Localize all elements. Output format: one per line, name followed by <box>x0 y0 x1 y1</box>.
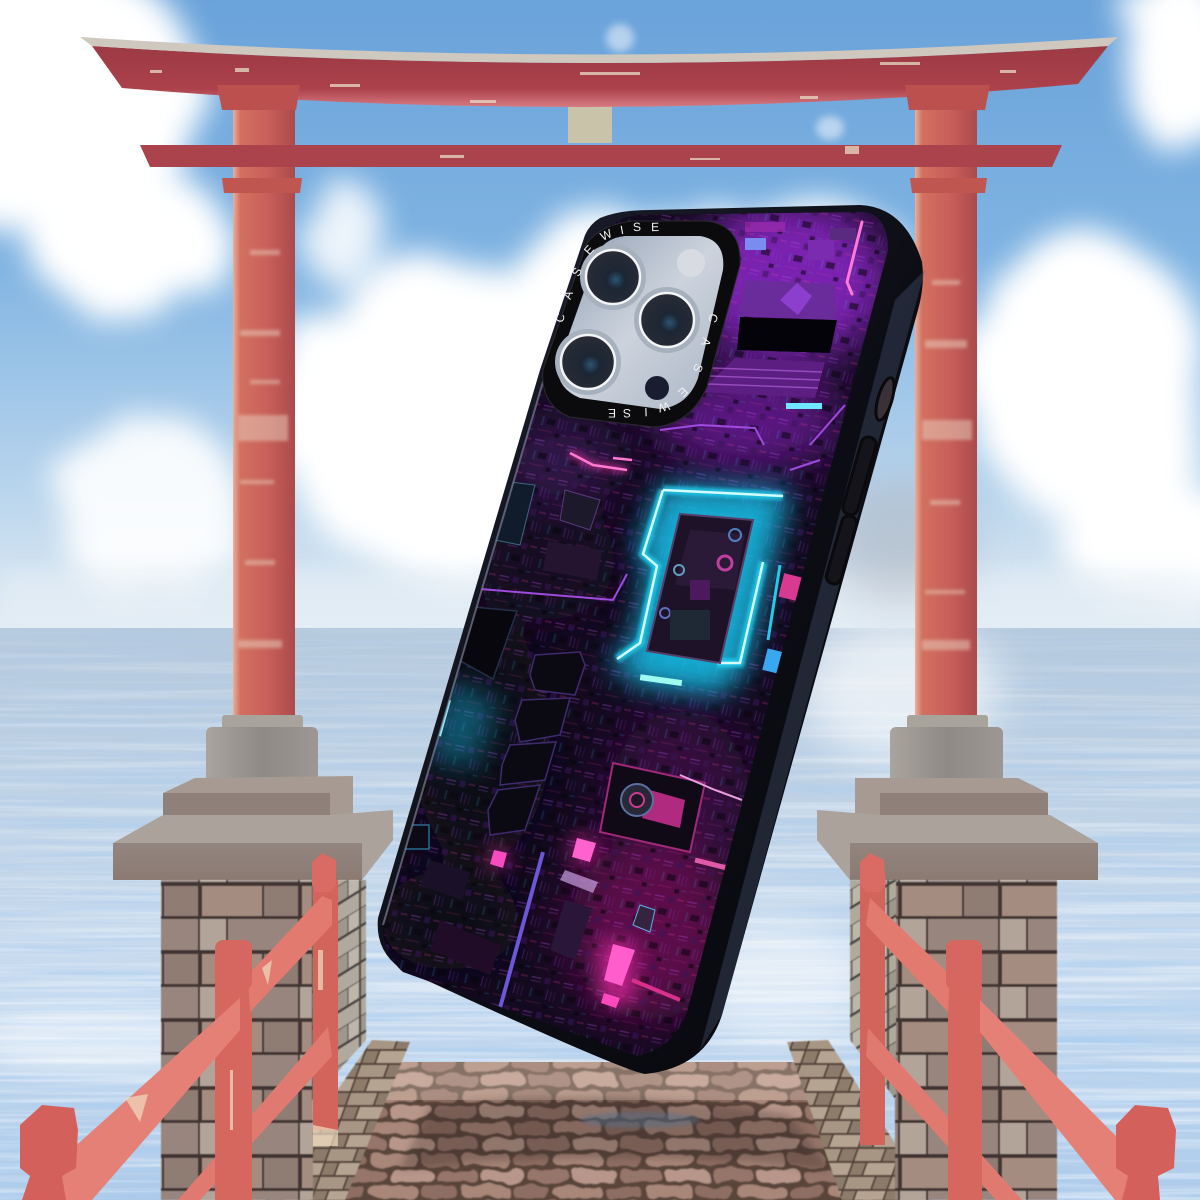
bumper text: I <box>644 405 648 419</box>
bumper text: C <box>705 312 721 325</box>
clouds <box>0 0 1200 630</box>
volume buttons <box>825 376 898 586</box>
stone walkway <box>262 1040 932 1200</box>
upper collars <box>217 85 990 110</box>
bumper text: C <box>552 311 568 324</box>
bumper text: W <box>656 399 671 415</box>
upper left modules <box>495 482 602 580</box>
camera plate <box>558 236 723 409</box>
side sheen <box>700 270 925 1050</box>
lower collars <box>222 178 987 193</box>
screen edge gloss <box>383 375 545 925</box>
screen artwork: circuit board <box>370 200 900 1070</box>
paint flakes <box>150 62 1016 160</box>
colour fields <box>380 200 890 1020</box>
bumper text: S <box>623 406 631 420</box>
bumper text: A <box>698 336 714 348</box>
right curb <box>787 1040 932 1200</box>
central strut <box>568 106 612 143</box>
left brick pier <box>161 880 313 1200</box>
right railing <box>860 853 1176 1200</box>
left pedestal <box>113 715 393 1200</box>
cyan processor halo <box>610 485 790 695</box>
memory modules <box>488 652 585 835</box>
camera bumper <box>543 221 740 427</box>
central chip <box>647 514 753 663</box>
phone case <box>370 200 925 1074</box>
lens two <box>634 287 700 353</box>
top beam <box>92 46 1108 107</box>
neon line: upper right <box>847 222 862 294</box>
right edge accents <box>762 565 802 674</box>
left corner accent <box>386 875 392 895</box>
left cyan glow <box>425 680 500 770</box>
flash <box>677 249 705 277</box>
bumper text: S <box>569 265 585 279</box>
sea <box>0 620 1200 1200</box>
left pillar <box>233 95 295 720</box>
right brick pier <box>895 880 1057 1200</box>
bumper text: E <box>581 242 597 258</box>
lower beam <box>140 145 1062 167</box>
lens three <box>555 329 621 395</box>
bumper text: S <box>690 362 706 374</box>
lens one <box>580 244 646 310</box>
pink lights <box>490 775 742 1008</box>
dark chip <box>457 607 517 679</box>
magenta accent <box>570 453 632 470</box>
pillar wear marks <box>238 250 972 650</box>
left curb <box>262 1040 410 1200</box>
bumper text: S <box>633 220 641 234</box>
bumper text: E <box>608 406 616 420</box>
right pedestal <box>817 715 1098 1200</box>
camera island <box>543 220 740 427</box>
bumper text: E <box>675 384 691 400</box>
sky background <box>0 0 1200 630</box>
case body <box>378 205 923 1074</box>
left railing <box>20 853 338 1200</box>
top lip <box>80 37 1118 63</box>
sensor <box>645 376 669 400</box>
trace texture <box>370 200 900 1070</box>
torii gate <box>80 37 1118 720</box>
bumper text: E <box>651 220 659 234</box>
bumper text <box>552 220 721 420</box>
bumper text: W <box>598 226 615 244</box>
cyan bar <box>786 403 822 409</box>
bumper text: I <box>619 223 625 237</box>
violet diagonal <box>500 852 543 1008</box>
knob unit <box>600 763 705 852</box>
lower chips <box>405 825 655 975</box>
violet traces <box>480 405 845 600</box>
right pillar <box>915 95 977 720</box>
upper right modules <box>700 222 856 398</box>
bumper text: A <box>560 289 576 301</box>
